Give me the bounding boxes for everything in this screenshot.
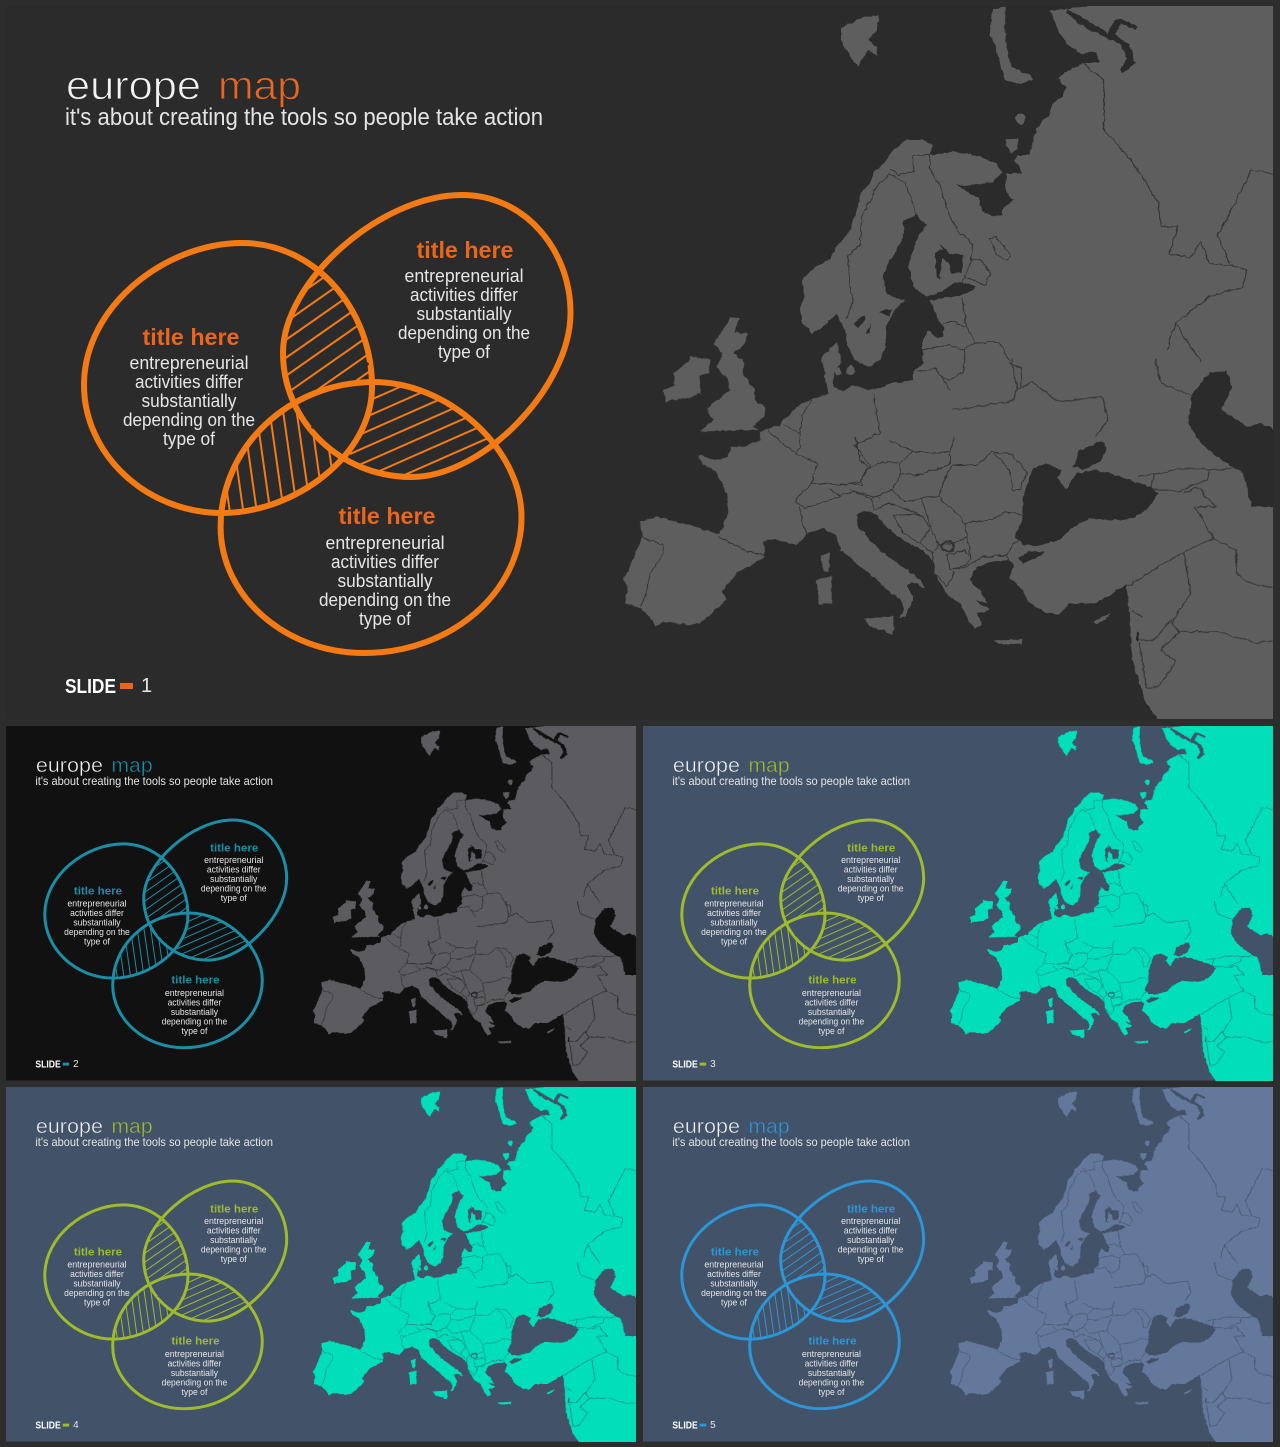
text block: left circle [123, 324, 255, 449]
text block: bottom circle: title here [171, 1336, 220, 1348]
subtitle: it's about creating the tools so people take action [35, 774, 273, 788]
europe map [950, 1074, 1280, 1447]
text block: bottom circle: entrepreneurial [326, 533, 444, 553]
text block: bottom circle: activities differ [331, 552, 439, 572]
text block: right circle: depending on the [201, 884, 267, 894]
text block: left circle [701, 886, 767, 946]
text block: left circle [64, 886, 130, 946]
subtitle: it's about creating the tools so people take action [672, 1135, 910, 1149]
text block: right circle: entrepreneurial [841, 855, 900, 865]
heading [674, 1122, 788, 1137]
text block: right circle [838, 1203, 904, 1264]
text block: left circle: activities differ [70, 1269, 124, 1279]
text block: right circle: substantially [847, 1235, 895, 1245]
text block: right circle: type of [221, 1254, 247, 1264]
text block: bottom circle [162, 1336, 227, 1397]
slide number [36, 1060, 78, 1068]
text block: right circle: entrepreneurial [204, 855, 263, 865]
heading: europe [673, 1116, 740, 1138]
heading [36, 761, 152, 776]
text block: left circle: substantially [710, 917, 758, 927]
venn diagram [45, 820, 287, 1048]
text block: bottom circle: substantially [171, 1368, 219, 1378]
slide number [36, 1421, 78, 1428]
text block: bottom circle [162, 975, 227, 1036]
text block: bottom circle: depending on the [799, 1016, 864, 1026]
heading: europe [36, 1116, 103, 1138]
heading [68, 78, 299, 107]
text block: left circle: depending on the [701, 927, 767, 937]
text block: left circle: substantially [73, 917, 121, 927]
text block: left circle: entrepreneurial [704, 1259, 764, 1269]
text block: left circle: depending on the [701, 1288, 767, 1298]
text block: bottom circle: entrepreneurial [802, 1349, 861, 1359]
text block: right circle: activities differ [207, 1226, 261, 1236]
text block: right circle: entrepreneurial [841, 1216, 900, 1226]
text block: right circle: entrepreneurial [204, 1216, 263, 1226]
heading: map [111, 1116, 153, 1138]
europe map [950, 713, 1280, 1086]
text block: left circle: substantially [73, 1278, 121, 1288]
text block: left circle: type of [84, 936, 110, 946]
text block: left circle: type of [721, 1297, 747, 1307]
text block: left circle: type of [721, 936, 747, 946]
text block: left circle: depending on the [64, 1288, 130, 1298]
text block: right circle: type of [858, 1254, 884, 1264]
heading: map [218, 64, 301, 108]
heading: europe [673, 755, 740, 777]
slide number [66, 678, 152, 693]
text block: left circle: entrepreneurial [704, 898, 764, 908]
text block: right circle: type of [438, 342, 491, 362]
text block: right circle: type of [858, 893, 884, 903]
text block: bottom circle [799, 975, 864, 1036]
text block: right circle: depending on the [398, 323, 530, 343]
text block: right circle: activities differ [844, 1226, 898, 1236]
text block: left circle: title here [74, 886, 122, 898]
heading: map [748, 755, 790, 777]
text block: bottom circle: depending on the [799, 1377, 864, 1387]
text block: left circle: activities differ [707, 908, 761, 918]
text block: bottom circle: activities differ [168, 1358, 221, 1368]
text block: left circle: entrepreneurial [67, 1259, 127, 1269]
text block: bottom circle: substantially [808, 1368, 856, 1378]
text block: right circle: substantially [416, 304, 512, 324]
text block: bottom circle [319, 503, 451, 629]
text block: left circle: depending on the [64, 927, 130, 937]
text block: left circle: entrepreneurial [130, 353, 248, 373]
text block: bottom circle: substantially [171, 1007, 219, 1017]
europe map [312, 726, 636, 1081]
panel: slide 5 [643, 1074, 1280, 1447]
text block: left circle: activities differ [70, 908, 124, 918]
text block: bottom circle [799, 1336, 864, 1397]
text block: right circle: depending on the [838, 884, 904, 894]
text block: left circle: title here [74, 1247, 122, 1259]
text block: right circle [838, 842, 904, 903]
text block: bottom circle: depending on the [319, 590, 451, 610]
text block: right circle: activities differ [410, 285, 518, 305]
panel: slide 4 [6, 1074, 659, 1447]
slide number: SLIDE [65, 676, 116, 698]
text block: left circle [64, 1247, 130, 1307]
text block: bottom circle: type of [359, 609, 412, 629]
text block: bottom circle: type of [182, 1026, 208, 1036]
panel: slide 1 [6, 0, 1280, 730]
text block: right circle [201, 842, 267, 903]
heading: europe [36, 755, 103, 777]
text block: right circle [201, 1203, 267, 1264]
text block: bottom circle: entrepreneurial [165, 1349, 224, 1359]
slide number: 5 [710, 1420, 716, 1431]
text block: right circle: title here [416, 237, 514, 263]
text block: left circle: depending on the [123, 410, 255, 430]
heading: europe [66, 64, 201, 108]
text block: bottom circle: title here [171, 975, 220, 987]
subtitle: it's about creating the tools so people take action [35, 1135, 273, 1149]
text block: left circle: substantially [710, 1278, 758, 1288]
text block: bottom circle: activities differ [805, 1358, 858, 1368]
text block: right circle: type of [221, 893, 247, 903]
slide number: SLIDE [672, 1060, 698, 1071]
text block: bottom circle: entrepreneurial [802, 988, 861, 998]
slide number: SLIDE [35, 1060, 61, 1071]
slide number: SLIDE [672, 1421, 698, 1432]
europe map [623, 0, 1280, 730]
heading: map [111, 755, 153, 777]
text block: left circle: type of [84, 1297, 110, 1307]
europe map [312, 1087, 636, 1442]
slide number: 2 [73, 1059, 79, 1070]
panel: slide 3 [643, 713, 1280, 1086]
slide number: 4 [73, 1420, 79, 1431]
text block: left circle: activities differ [135, 372, 243, 392]
text block: right circle: activities differ [207, 865, 261, 875]
text block: right circle: title here [847, 1203, 895, 1215]
text block: right circle: title here [210, 842, 258, 854]
text block: right circle: title here [847, 842, 895, 854]
text block: left circle: entrepreneurial [67, 898, 127, 908]
slide number [672, 1060, 716, 1068]
text block: left circle: substantially [142, 391, 236, 411]
text block: bottom circle: title here [338, 503, 436, 529]
text block: bottom circle: title here [808, 975, 857, 987]
venn diagram [682, 1181, 924, 1409]
text block: bottom circle: entrepreneurial [165, 988, 224, 998]
venn diagram [45, 1181, 287, 1409]
panel: slide 2 [6, 713, 659, 1086]
slide number: SLIDE [35, 1421, 61, 1432]
text block: bottom circle: substantially [338, 571, 432, 591]
venn diagram [84, 195, 570, 653]
text block: bottom circle: type of [819, 1387, 845, 1397]
slide number: 3 [710, 1059, 716, 1070]
text block: right circle: activities differ [844, 865, 898, 875]
text block: bottom circle: depending on the [162, 1016, 227, 1026]
slide number [672, 1420, 716, 1432]
slide number: 1 [141, 675, 152, 697]
text block: right circle: depending on the [838, 1245, 904, 1255]
text block: bottom circle: depending on the [162, 1377, 227, 1387]
text block: bottom circle: title here [808, 1336, 857, 1348]
heading: map [748, 1116, 790, 1138]
text block: right circle: title here [210, 1203, 258, 1215]
subtitle: it's about creating the tools so people take action [65, 104, 543, 131]
text block: left circle: type of [163, 429, 216, 449]
text block: bottom circle: type of [182, 1387, 208, 1397]
text block: bottom circle: activities differ [805, 997, 858, 1007]
text block: right circle: entrepreneurial [404, 266, 524, 286]
text block: left circle: activities differ [707, 1269, 761, 1279]
text block: right circle [398, 237, 530, 362]
text block: left circle: title here [711, 886, 759, 898]
text block: left circle: title here [142, 324, 240, 350]
text block: left circle [701, 1247, 767, 1307]
subtitle: it's about creating the tools so people take action [672, 774, 910, 788]
text block: bottom circle: substantially [808, 1007, 856, 1017]
text block: bottom circle: activities differ [168, 997, 221, 1007]
heading [36, 1122, 152, 1137]
heading [674, 761, 788, 776]
venn diagram [682, 820, 924, 1048]
text block: right circle: substantially [210, 874, 258, 884]
text block: right circle: depending on the [201, 1245, 267, 1255]
text block: right circle: substantially [210, 1235, 258, 1245]
text block: right circle: substantially [847, 874, 895, 884]
text block: left circle: title here [711, 1247, 759, 1259]
text block: bottom circle: type of [819, 1026, 845, 1036]
